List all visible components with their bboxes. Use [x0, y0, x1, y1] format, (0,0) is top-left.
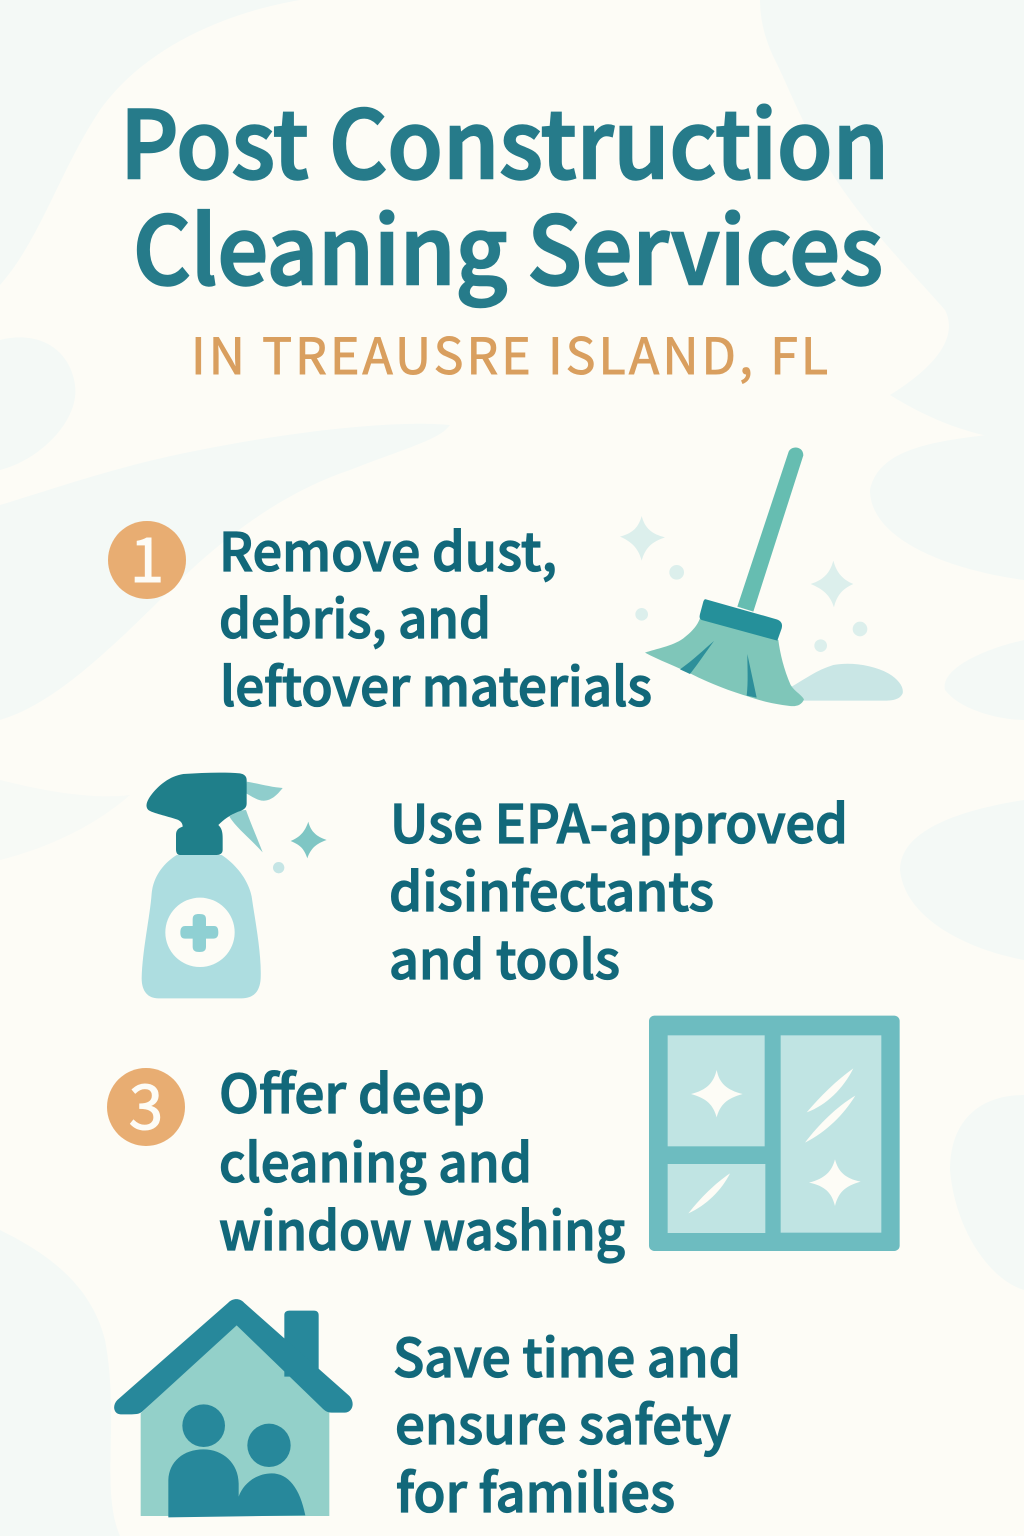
- step 1 text: debris, and: [219, 578, 491, 654]
- step 4 text: for families: [396, 1452, 675, 1528]
- dust pile: [792, 664, 903, 701]
- medical cross: [180, 914, 218, 952]
- bottle body: [142, 855, 261, 998]
- title: Post Construction: [120, 70, 889, 205]
- step 2 text: and tools: [389, 919, 620, 995]
- sparkles and shine marks: [688, 1068, 861, 1213]
- icon: house with family: [114, 1299, 353, 1517]
- step 1 text: [219, 511, 652, 722]
- step 1 text: Remove dust,: [219, 511, 557, 587]
- droplet: [273, 862, 284, 873]
- step 3 number badge: [107, 1057, 185, 1147]
- sparkles: [620, 516, 867, 652]
- step 2 text: [389, 783, 848, 995]
- roof: [114, 1299, 353, 1414]
- step 1 number badge: 1: [130, 510, 164, 600]
- step 2 text: Use EPA-approved: [390, 783, 848, 859]
- spray mist: [229, 782, 283, 852]
- broom handle: [737, 447, 803, 612]
- step 1 text: leftover materials: [220, 646, 652, 722]
- family figures: [168, 1404, 305, 1517]
- step 4 text: Save time and: [393, 1317, 741, 1393]
- broom bristles: [645, 618, 804, 706]
- step 3 text: cleaning and: [219, 1122, 532, 1198]
- step 1 number badge: [108, 510, 186, 600]
- sprayer head: [147, 773, 247, 855]
- subtitle: IN TREAUSRE ISLAND, FL: [191, 317, 828, 389]
- title: Cleaning Services: [133, 176, 883, 311]
- label circle: [165, 898, 235, 967]
- window frame: [649, 1016, 900, 1251]
- step 2 text: disinfectants: [389, 851, 714, 927]
- icon: clean window: [649, 1016, 900, 1251]
- step 3 text: window washing: [219, 1190, 625, 1266]
- glass panes: [668, 1035, 881, 1233]
- chimney: [284, 1311, 319, 1377]
- icon: spray bottle: [142, 773, 327, 998]
- bristle streaks: [680, 641, 757, 698]
- step 4 text: [393, 1317, 741, 1528]
- broom collar: [700, 599, 782, 641]
- step 3 text: [219, 1053, 625, 1266]
- step 3 text: Offer deep: [219, 1053, 485, 1129]
- step 3 number badge: 3: [129, 1057, 163, 1147]
- title: [120, 70, 889, 311]
- house wall: [141, 1323, 329, 1516]
- icon: broom sweeping dust: [620, 447, 903, 706]
- step 4 text: ensure safety: [395, 1384, 731, 1460]
- sparkle: [291, 822, 327, 858]
